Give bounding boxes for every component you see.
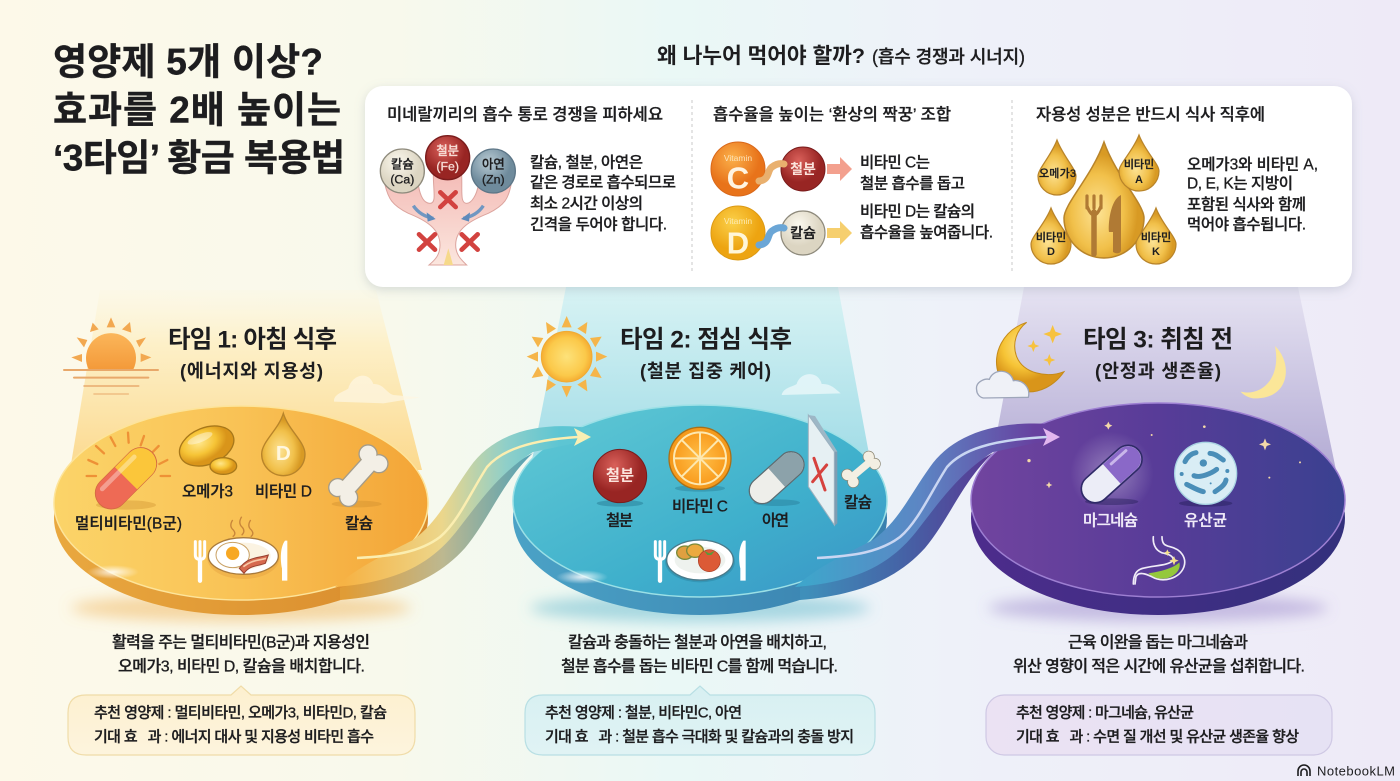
- icon: vitamin C with iron: 철분: [790, 161, 816, 177]
- item: omega 3: [174, 418, 240, 474]
- callout: time 3: 기대 효 과 : 수면 질 개선 및 유산균 생존율 향상: [1016, 728, 1299, 746]
- icon: fat soluble vitamin drops: D: [1047, 246, 1055, 258]
- description: time 2: [561, 634, 838, 676]
- title: 효과를 2배 높이는: [53, 90, 341, 130]
- icon: fat soluble vitamin drops: [1031, 135, 1176, 264]
- diagram: mineral absorption competition: [380, 136, 515, 265]
- icon: midday sun: [527, 316, 607, 397]
- diagram: mineral absorption competition: (Ca): [390, 173, 414, 187]
- callout: time 1: 기대 효 과 : 에너지 대사 및 지용성 비타민 흡수: [94, 728, 374, 746]
- column 1 text: [530, 154, 676, 234]
- icon: fat soluble vitamin drops: K: [1152, 246, 1160, 258]
- labels: time 2 platform: 비타민 C: [672, 498, 728, 516]
- diagram: mineral absorption competition: (Zn): [482, 173, 505, 187]
- icon: lunch plate: [655, 540, 746, 582]
- description: time 3: 근육 이완을 돕는 마그네슘과: [1068, 634, 1248, 652]
- NotebookLM logo: NotebookLM: [1317, 764, 1395, 778]
- callout: time 2: 추천 영양제 : 철분, 비타민C, 아연: [545, 704, 742, 722]
- shadow: platforms: [71, 594, 1328, 622]
- panel: absorption information: [365, 86, 1352, 287]
- diagram: mineral absorption competition: 칼슘: [391, 157, 414, 171]
- platform: time 2: [513, 405, 887, 615]
- callout: time 2: 기대 효 과 : 철분 흡수 극대화 및 칼슘과의 충돌 방지: [545, 728, 854, 746]
- labels: time 1 platform: [75, 482, 373, 532]
- description: time 2: 칼슘과 충돌하는 철분과 아연을 배치하고,: [568, 634, 827, 652]
- icon: fat soluble vitamin drops: 오메가3: [1039, 167, 1076, 180]
- callout: time 1: [68, 686, 415, 755]
- heading: time 2: 타임 2: 점심 식후: [620, 326, 792, 354]
- item: magnesium capsule: [1070, 432, 1153, 515]
- labels: time 2 platform: 아연: [762, 512, 789, 530]
- labels: time 2 platform: 철분: [606, 512, 633, 530]
- column 3 heading: 자용성 성분은 반드시 식사 직후에: [1036, 105, 1265, 124]
- column 2 text: 철분 흡수를 돕고: [860, 174, 965, 192]
- column 3 text: 포함된 식사와 함께: [1187, 196, 1306, 214]
- icon: vitamin C with iron: C: [727, 160, 749, 196]
- heading: time 1: (에너지와 지용성): [180, 360, 323, 382]
- title: 영양제 5개 이상?: [53, 42, 323, 82]
- diagram: mineral absorption competition: 아연: [482, 157, 505, 171]
- icon: cloud, time 1: [334, 376, 420, 403]
- column 2 text: 비타민 D는 칼슘의: [860, 202, 975, 220]
- labels: time 2 platform: [606, 494, 872, 530]
- icon: vitamin C with iron: [711, 142, 852, 196]
- column 1 text: 긴격을 두어야 합니다.: [530, 216, 667, 234]
- icon: moon, stars and cloud: [976, 322, 1064, 398]
- item: calcium bone: [326, 442, 391, 509]
- column 3 text: 먹어야 흡수됩니다.: [1187, 216, 1306, 234]
- description: time 1: 활력을 주는 멀티비타민(B군)과 지용성인: [112, 634, 370, 652]
- icon: stomach: [1133, 537, 1185, 584]
- icon: vitamin D with calcium: [711, 206, 852, 260]
- item: iron: 철분: [606, 467, 634, 484]
- icon: pale crescent moon: [1241, 346, 1286, 398]
- description: time 1: [112, 634, 370, 676]
- title: ‘3타임’ 황금 복용법: [53, 138, 345, 178]
- icon: breakfast plate: [195, 517, 287, 581]
- heading: time 3: 타임 3: 취침 전: [1083, 326, 1233, 354]
- column 2 heading: 흡수율을 높이는 ‘환상의 짝꿍’ 조합: [713, 105, 951, 124]
- icon: sunrise: [64, 317, 158, 394]
- icon: fat soluble vitamin drops: 비타민: [1141, 231, 1171, 244]
- light beam: time 1: [70, 290, 422, 470]
- heading: why split doses: (흡수 경쟁과 시너지): [872, 47, 1025, 67]
- column 1 heading: 미네랄끼리의 흡수 통로 경쟁을 피하세요: [387, 105, 663, 124]
- callout: time 3: 추천 영양제 : 마그네슘, 유산균: [1016, 704, 1194, 722]
- callout: time 1: 추천 영양제 : 멀티비타민, 오메가3, 비타민D, 칼슘: [94, 704, 387, 722]
- labels: time 1 platform: 오메가3: [182, 482, 233, 500]
- column 3 text: 오메가3와 비타민 A,: [1187, 156, 1318, 174]
- heading: time 2: [620, 326, 792, 382]
- labels: time 3 platform: 마그네슘: [1083, 512, 1138, 530]
- column 1 text: 같은 경로로 흡수되므로: [530, 174, 676, 192]
- ribbon path: time 2 to time 3: [795, 423, 1060, 600]
- column 1 text: 최소 2시간 이상의: [530, 194, 643, 212]
- decoration: stars on platform 3: [1027, 422, 1301, 488]
- column 3 text: D, E, K는 지방이: [1187, 174, 1293, 192]
- labels: time 1 platform: 칼슘: [345, 514, 373, 532]
- platform: time 1: [54, 406, 428, 615]
- heading: why split doses: 왜 나누어 먹어야 할까?: [657, 44, 865, 68]
- heading: why split doses: [657, 44, 1025, 68]
- item: vitamin D drop: D: [276, 442, 291, 465]
- item: iron: [593, 449, 647, 507]
- diagram: mineral absorption competition: 철분: [436, 144, 459, 158]
- platform: time 3: [971, 403, 1345, 615]
- light beam: time 3: [990, 287, 1336, 470]
- callout: time 3: [986, 695, 1332, 755]
- title: [53, 42, 345, 178]
- item: vitamin D drop: [262, 413, 305, 476]
- description: time 3: 위산 영향이 적은 시간에 유산균을 섭취합니다.: [1013, 658, 1305, 676]
- item: small calcium bone: [840, 449, 882, 489]
- heading: time 3: [1083, 326, 1233, 382]
- item: probiotics: [1175, 442, 1237, 507]
- column 3 text: [1187, 156, 1318, 234]
- icon: fat soluble vitamin drops: A: [1135, 174, 1143, 186]
- labels: time 3 platform: [1083, 512, 1227, 530]
- description: time 1: 오메가3, 비타민 D, 칼슘을 배치합니다.: [118, 658, 365, 676]
- icon: vitamin C with iron: Vitamin: [724, 153, 752, 163]
- icon: fat soluble vitamin drops: 비타민: [1036, 231, 1066, 244]
- icon: fat soluble vitamin drops: 비타민: [1124, 158, 1154, 171]
- item: zinc capsule: [744, 446, 809, 509]
- labels: time 1 platform: 비타민 D: [255, 482, 312, 500]
- column 2 text: 흡수율을 높여줍니다.: [860, 224, 993, 242]
- labels: time 2 platform: 칼슘: [844, 494, 872, 512]
- column 2 text: [860, 154, 993, 242]
- item: vitamin C orange: [669, 427, 731, 492]
- light beam: time 2: [530, 287, 872, 470]
- description: time 3: [1013, 634, 1305, 676]
- labels: time 3 platform: 유산균: [1184, 512, 1227, 530]
- heading: time 2: (철분 집중 케어): [640, 360, 771, 382]
- column 2 text: 비타민 C는: [860, 154, 930, 172]
- heading: time 1: [168, 326, 337, 382]
- description: time 2: 철분 흡수를 돕는 비타민 C를 함께 먹습니다.: [561, 658, 838, 676]
- item: multivitamin: [87, 433, 170, 516]
- callout: time 2: [525, 686, 875, 755]
- icon: vitamin D with calcium: 칼슘: [790, 225, 816, 241]
- icon: vitamin D with calcium: Vitamin: [724, 216, 752, 226]
- icon: cloud, time 2: [782, 374, 841, 395]
- heading: time 1: 타임 1: 아침 식후: [168, 326, 337, 354]
- labels: time 1 platform: 멀티비타민(B군): [75, 514, 182, 532]
- diagram: mineral absorption competition: (Fe): [436, 159, 459, 173]
- icon: vitamin D with calcium: D: [727, 226, 749, 260]
- heading: time 3: (안정과 생존율): [1095, 360, 1221, 382]
- column 1 text: 칼슘, 철분, 아연은: [530, 154, 643, 172]
- item: blocking barrier: [808, 415, 837, 526]
- ribbon path: time 1 to time 2: [335, 426, 591, 600]
